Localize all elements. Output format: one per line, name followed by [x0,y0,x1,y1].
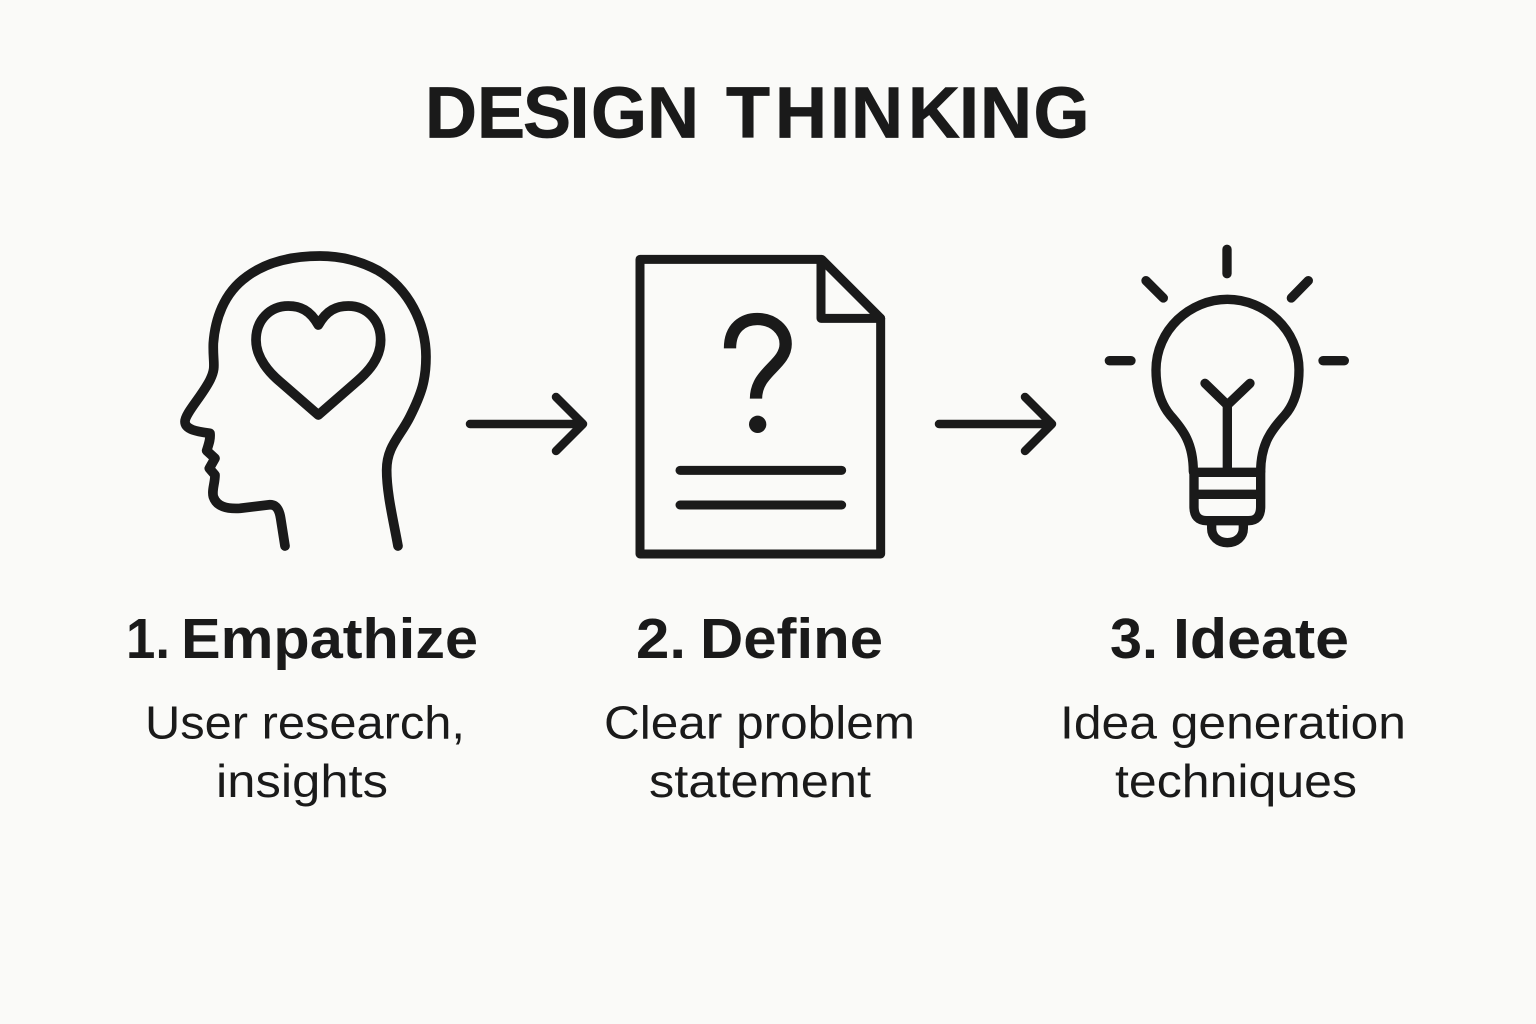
description line 1: Idea generation [1060,696,1406,748]
glass [1156,299,1299,472]
description line 2: insights [216,755,388,807]
question mark dot [749,416,766,433]
step number: 3. [1110,607,1158,671]
question mark [730,319,786,399]
description line 2: statement [649,755,871,807]
socket [1212,523,1243,543]
description line 2: techniques [1115,755,1357,807]
description line 1: User research, [145,696,465,748]
heading: Define [700,607,883,671]
step 1: empathize [126,607,478,807]
step 3: ideate [1060,607,1406,807]
page outline [640,259,881,554]
arrow: define to ideate [939,397,1052,451]
text lines [680,470,842,505]
icon: light bulb [1109,249,1344,543]
heading: Empathize [181,607,478,671]
step number: 2. [636,607,686,671]
icon: head with heart [185,256,426,546]
heading: Ideate [1173,607,1349,671]
arrow: empathize to define [470,397,583,451]
base [1194,472,1261,521]
heart [256,306,381,415]
folded corner [821,260,881,318]
title: DESIGN THINKING [425,74,1090,154]
filament [1205,383,1250,472]
step 2: define [604,607,915,807]
icon: document with question mark [640,259,881,554]
description line 1: Clear problem [604,696,915,748]
rays [1109,249,1344,361]
step number: 1. [126,607,170,671]
head outline [185,256,426,546]
